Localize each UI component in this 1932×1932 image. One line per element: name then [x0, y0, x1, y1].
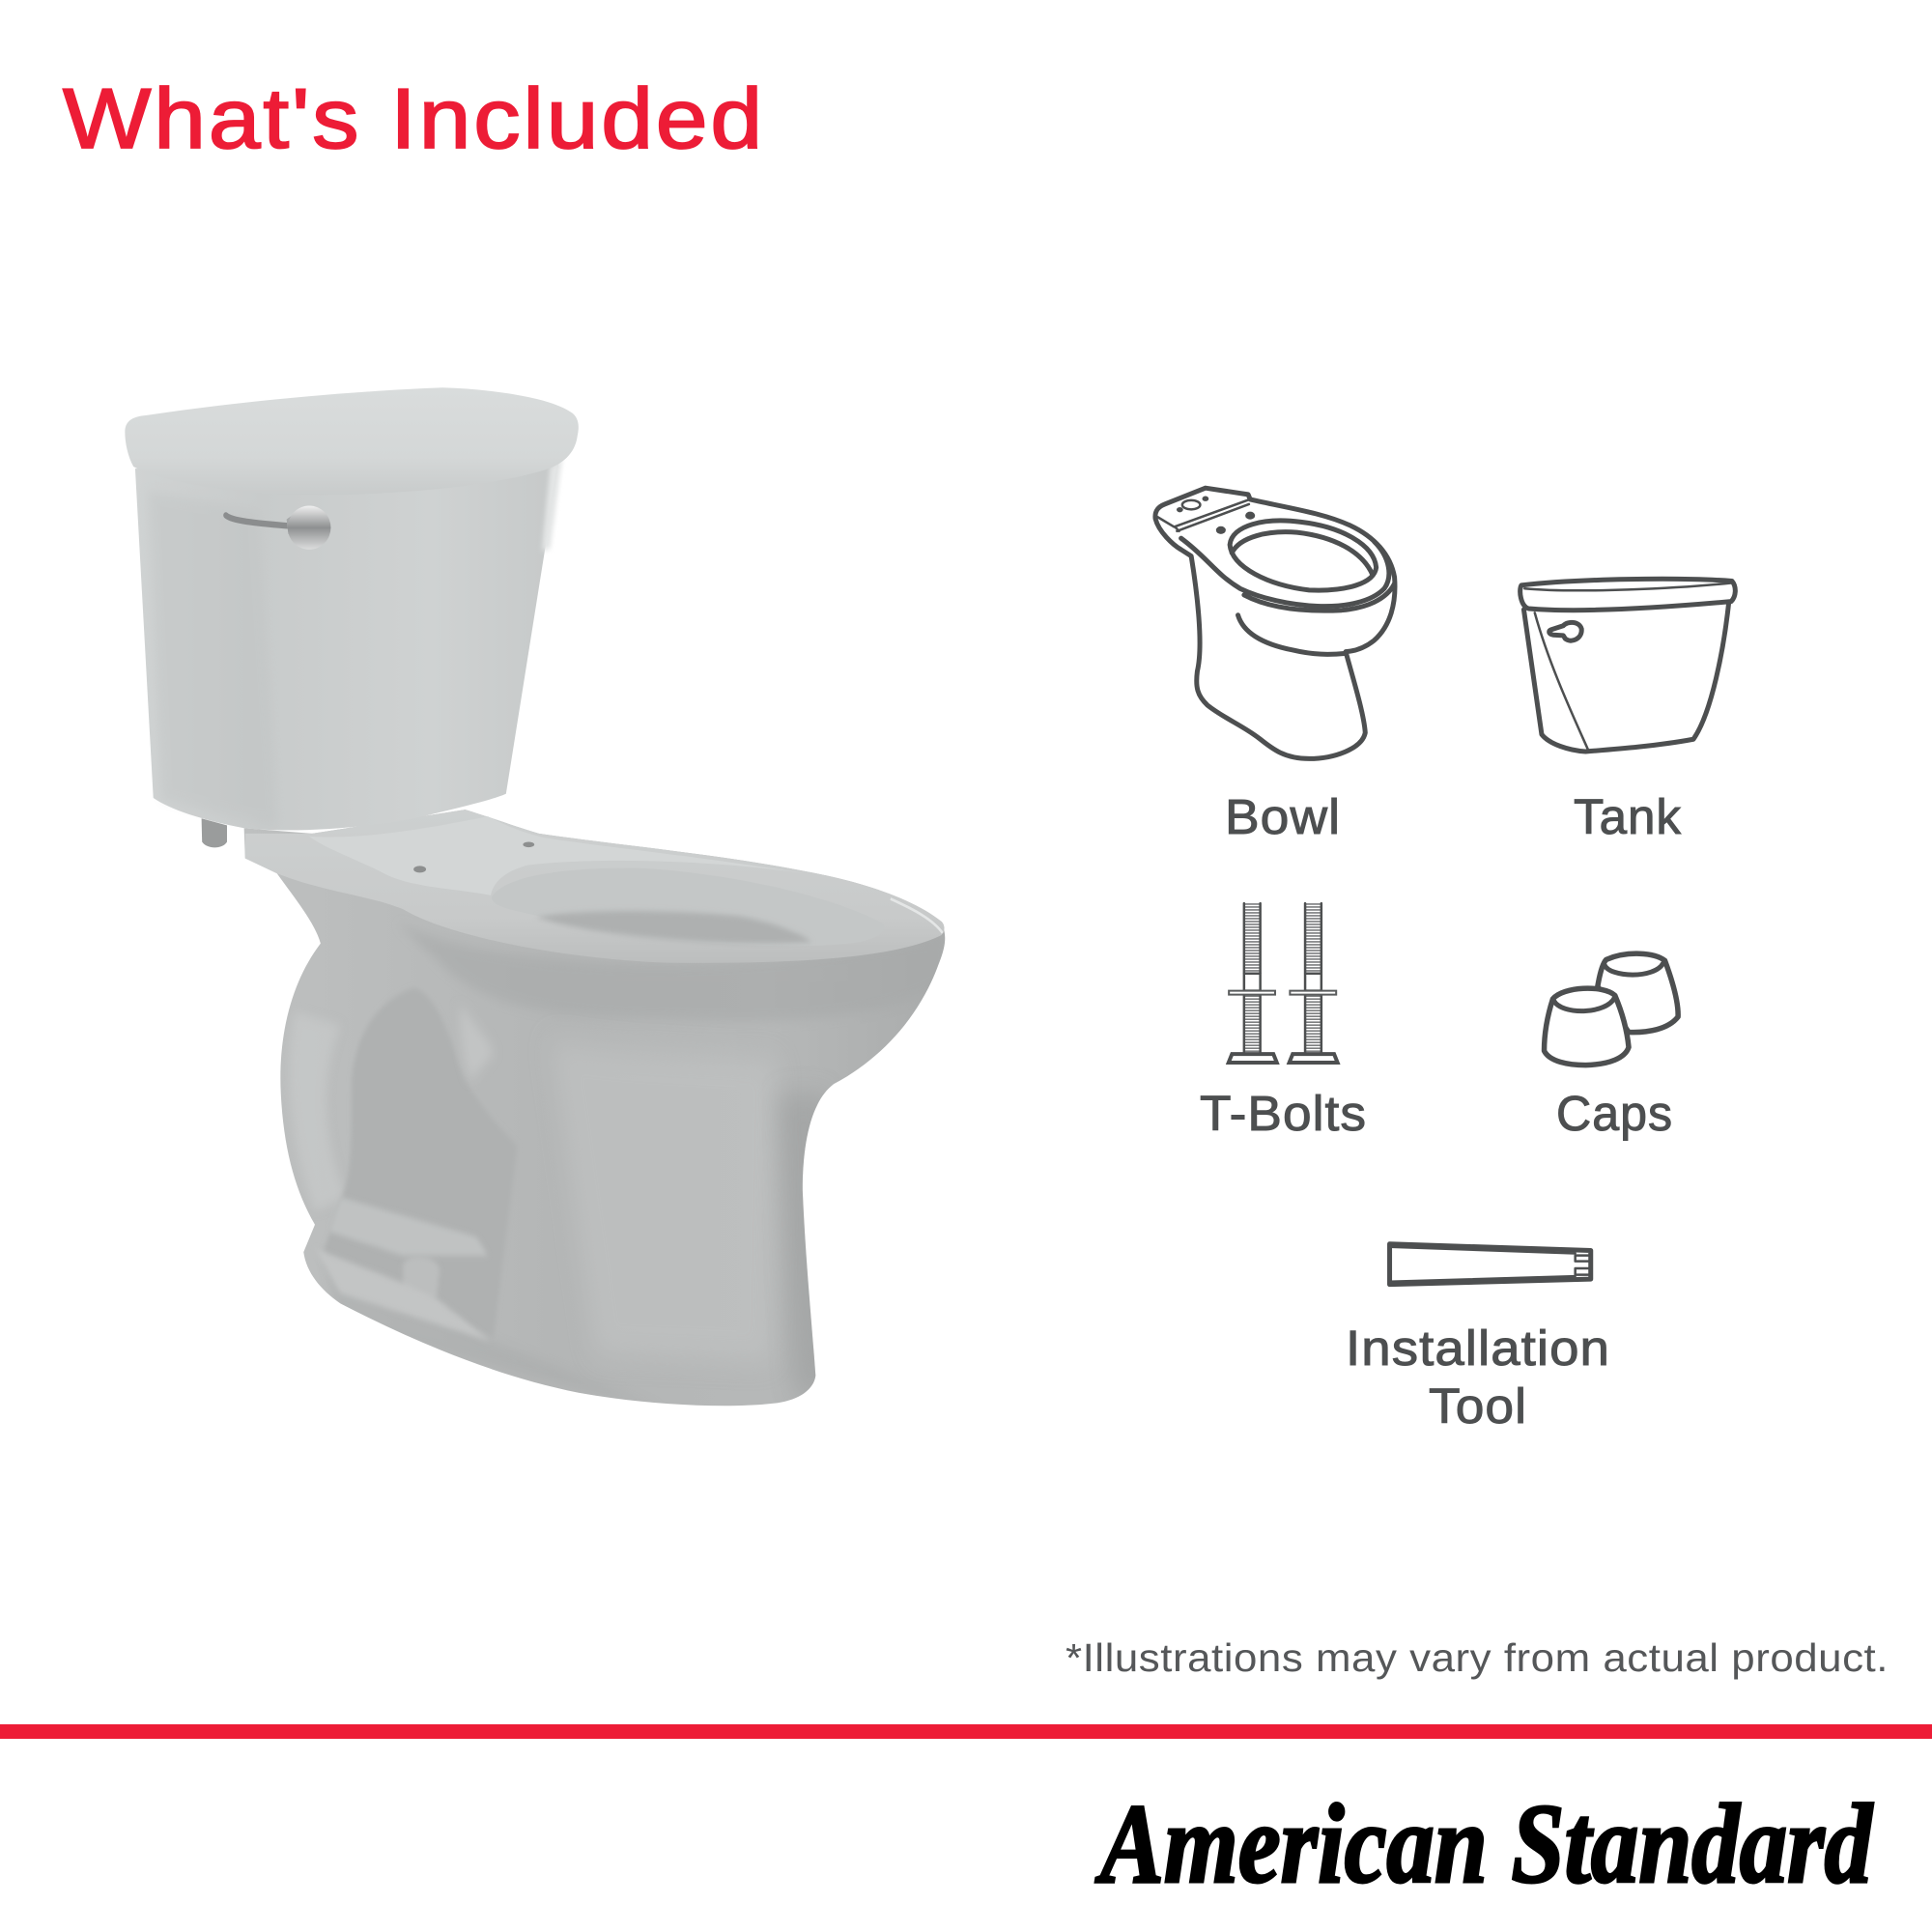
bowl opening: [492, 867, 884, 946]
cavity between trapway and pedestal: [326, 991, 494, 1321]
right bolt: [1290, 903, 1338, 1063]
icon: T-bolts: [1229, 903, 1338, 1063]
label: Installation Tool: [1346, 1321, 1610, 1434]
label: Installation Tool: Installation: [1346, 1321, 1610, 1376]
title: What's Included: [63, 71, 765, 166]
tank: [135, 463, 558, 830]
back cap: [1598, 953, 1678, 1033]
tank shading: [148, 491, 278, 827]
lid: [125, 387, 579, 496]
toilet bowl body: [244, 810, 945, 1410]
water supply shank: [202, 818, 227, 847]
rim and deck: [245, 810, 945, 963]
tank glossy edge: [542, 456, 563, 551]
icon: installation tool: [1390, 1244, 1591, 1285]
label: Tank: Tank: [1574, 789, 1682, 844]
label: Caps: Caps: [1556, 1086, 1673, 1141]
left bolt: [1229, 903, 1277, 1063]
red divider: [0, 1724, 1932, 1739]
icon: caps: [1545, 953, 1678, 1065]
label: T-Bolts: T-Bolts: [1200, 1086, 1367, 1141]
deck bolt holes: [413, 841, 534, 872]
flush handle: [226, 505, 330, 550]
icon: tank: [1520, 579, 1735, 752]
rim highlight: [891, 898, 943, 933]
front cap: [1545, 988, 1629, 1065]
product photo: two-piece toilet: [125, 387, 945, 1410]
footnote: *Illustrations may vary from actual product.: [1065, 1635, 1889, 1680]
label: Installation Tool: Tool: [1429, 1378, 1527, 1434]
icon: bowl: [1155, 488, 1395, 758]
label: Bowl: Bowl: [1225, 789, 1341, 844]
